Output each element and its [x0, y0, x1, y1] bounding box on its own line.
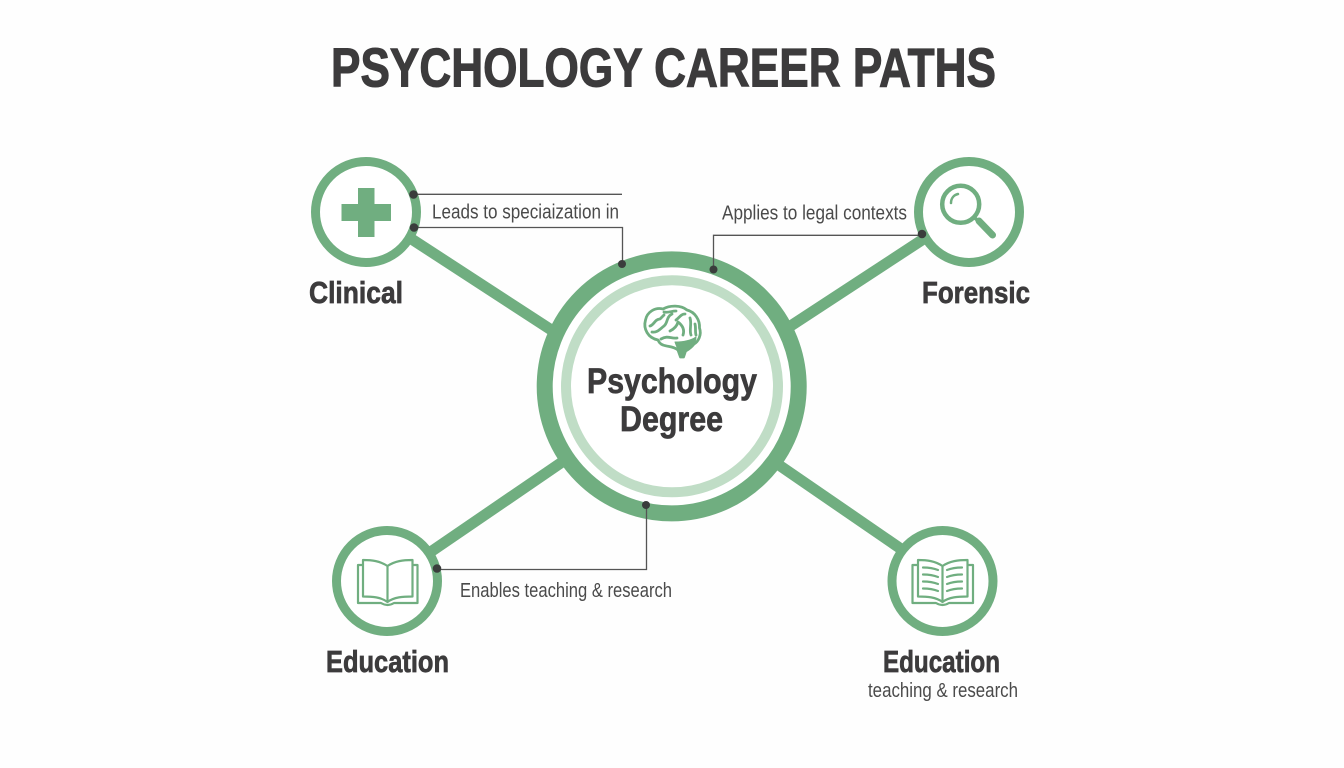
callout: Leads to specialization: Leads to speciaization in — [432, 202, 619, 224]
label: Education: Education — [883, 644, 1000, 679]
icon: open book with text lines — [912, 560, 973, 605]
hub label: Psychology — [587, 362, 757, 401]
sublabel: teaching & research: teaching & research — [868, 680, 1018, 702]
node: Education left — [326, 530, 449, 679]
callout: Leads to specialization — [409, 190, 626, 268]
central hub: Psychology Degree: Degree — [620, 400, 723, 439]
label: Clinical: Clinical — [309, 275, 403, 310]
callout: Applies to legal contexts — [710, 202, 926, 274]
callout: Enables teaching & research: Enables teaching & research — [460, 580, 672, 602]
callout: Applies to legal contexts: Applies to legal contexts — [722, 202, 907, 224]
node: Education right — [868, 530, 1018, 702]
icon: magnifying glass — [942, 186, 992, 235]
callout: Enables teaching & research — [433, 501, 672, 602]
node: Clinical — [309, 162, 416, 310]
icon: open book — [358, 560, 418, 605]
icon: brain — [645, 306, 700, 357]
central hub: Psychology Degree — [545, 259, 799, 513]
spokes connecting hub to career nodes — [410, 238, 925, 551]
title: PSYCHOLOGY CAREER PATHS — [331, 36, 996, 98]
icon: medical cross — [342, 188, 391, 237]
label: Education: Education — [326, 644, 449, 679]
label: Forensic: Forensic — [922, 275, 1030, 310]
node: Forensic — [918, 162, 1030, 310]
